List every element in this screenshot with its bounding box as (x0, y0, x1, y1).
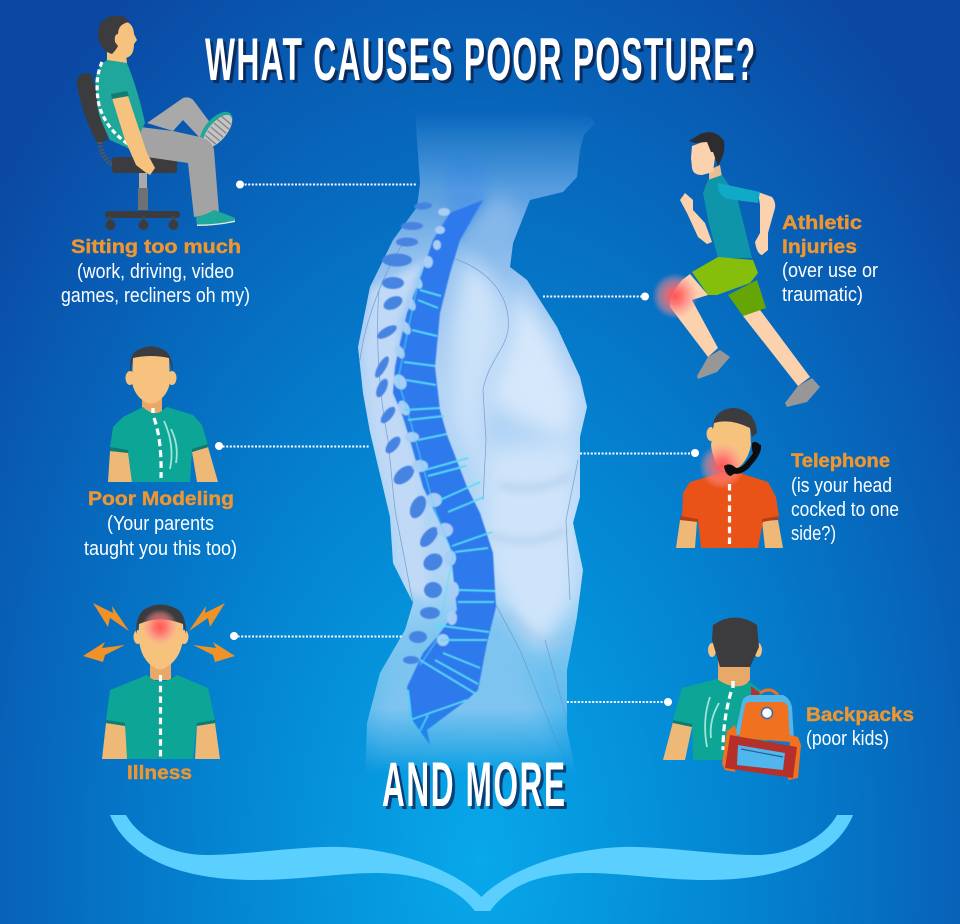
hair (136, 604, 186, 634)
lightning bolts (83, 603, 235, 662)
backpack pocket (725, 735, 797, 778)
raised shoe (193, 106, 239, 154)
head (706, 427, 716, 441)
shorts (692, 257, 758, 295)
head (126, 371, 134, 385)
hair (98, 16, 129, 54)
raised leg (147, 97, 214, 138)
label: telephone: cocked to one (791, 499, 899, 521)
brace (110, 815, 853, 911)
label: backpacks: Backpacks (806, 705, 914, 726)
label: backpacks (806, 705, 914, 750)
discs and nerves (398, 270, 495, 735)
label: illness: Illness (127, 763, 192, 784)
back arm (755, 192, 775, 255)
spine dashes (731, 681, 735, 688)
neck (150, 662, 171, 680)
spine dashes (151, 408, 155, 413)
backpack sides (722, 725, 801, 780)
label: telephone: (is your head (791, 475, 892, 497)
connector lines with end dots (215, 180, 699, 706)
label: sitting too much (61, 237, 250, 307)
arms (676, 520, 783, 548)
neck (142, 395, 162, 415)
label: poor modeling (84, 489, 237, 560)
abdomen light (485, 440, 575, 650)
shirt (673, 679, 770, 760)
icon: man on telephone (676, 408, 783, 548)
label: athletic injuries: Injuries (782, 237, 857, 258)
neck (709, 165, 722, 180)
head (691, 140, 716, 175)
seat (112, 157, 177, 173)
sleeve (718, 183, 760, 203)
label: athletic injuries (782, 213, 878, 306)
spine dashes (159, 675, 162, 759)
neck (718, 660, 750, 692)
rear shoe (785, 378, 820, 407)
back shoulder pale region (362, 260, 430, 600)
hair (712, 618, 759, 667)
icon: illness man with headache (83, 603, 235, 759)
heading: and more: AND MORE (382, 749, 565, 820)
spine dashes (97, 62, 131, 146)
backpack strap (751, 686, 760, 700)
heading: and more: AND MORE (385, 752, 568, 823)
label: poor modeling: Poor Modeling (88, 489, 234, 510)
hip region (370, 610, 570, 770)
tension lines (164, 421, 177, 469)
spine dashes (728, 484, 731, 548)
anatomical torso with spine (358, 118, 594, 768)
icon: poor modeling man (108, 346, 218, 482)
label: athletic injuries: Athletic (782, 213, 862, 234)
facets (391, 208, 459, 646)
title: WHAT CAUSES POOR POSTURE? (208, 31, 758, 97)
cervical spine (448, 184, 488, 241)
foot (196, 210, 235, 226)
hair (130, 346, 173, 372)
lower leg (140, 127, 219, 217)
arms (108, 447, 218, 482)
chair back (77, 73, 108, 143)
arm (112, 96, 155, 175)
backpack button (762, 708, 772, 718)
backpack frame (735, 695, 794, 740)
icon: man sitting in office chair (77, 16, 239, 230)
arms (102, 723, 220, 759)
label: sitting too much: (work, driving, video (77, 261, 234, 283)
label: athletic injuries: traumatic) (782, 284, 863, 306)
backpack handle (760, 690, 778, 695)
neck (107, 46, 127, 63)
label: backpacks: (poor kids) (806, 728, 889, 750)
torso (703, 175, 752, 258)
label: poor modeling: (Your parents (107, 513, 214, 535)
title: WHAT CAUSES POOR POSTURE? (205, 28, 755, 94)
sleeve bands (680, 516, 779, 522)
tension lines (705, 697, 719, 747)
label: poor modeling: taught you this too) (84, 538, 237, 560)
rear shorts (728, 280, 766, 316)
ears (708, 643, 716, 657)
icon: boy with backpack seen from behind (663, 618, 801, 780)
rear leg (743, 310, 810, 386)
label: telephone: side?) (791, 523, 836, 545)
neck shading (476, 192, 524, 262)
chest light (490, 285, 578, 440)
neck glow (699, 443, 745, 489)
chair post and base (139, 172, 147, 190)
shirt (110, 407, 208, 482)
icon: runner with sore knee (652, 132, 820, 407)
label: sitting too much: games, recliners oh my) (61, 285, 250, 307)
headache glow (142, 609, 178, 645)
vertebral column (373, 200, 496, 745)
spinous processes (373, 202, 446, 664)
muscle lines (360, 245, 578, 760)
hair (712, 408, 757, 437)
label: telephone: Telephone (791, 451, 890, 472)
head (134, 630, 142, 644)
arm (663, 722, 692, 760)
front leg (670, 274, 718, 357)
shirt (682, 470, 779, 548)
hair (689, 132, 724, 166)
head (105, 21, 137, 58)
front shoe (697, 350, 730, 379)
label: telephone (791, 451, 899, 545)
body silhouette and soft shading (358, 118, 594, 768)
front arm (680, 193, 712, 244)
knee glow (652, 273, 698, 319)
abdominal shadows (490, 475, 570, 644)
arm light (452, 262, 505, 480)
shirt (106, 675, 215, 759)
chair spring (100, 142, 112, 165)
label: sitting too much: Sitting too much (71, 237, 241, 258)
telephone (727, 445, 758, 471)
torso (95, 60, 145, 150)
sleeve bands (110, 444, 208, 453)
label: athletic injuries: (over use or (782, 260, 878, 282)
